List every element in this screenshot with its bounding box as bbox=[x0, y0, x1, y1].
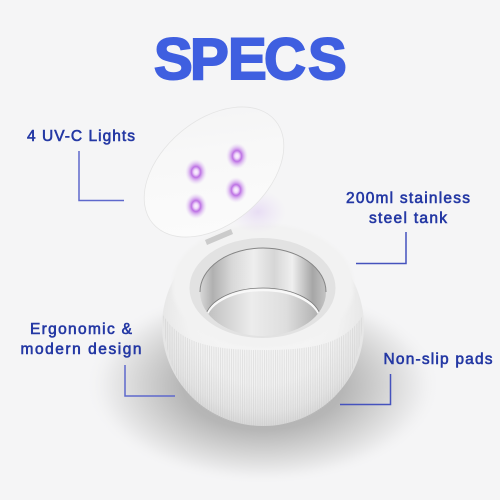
UV light 1 bbox=[226, 143, 248, 169]
ribbed texture bbox=[163, 315, 363, 426]
lid glow bbox=[230, 190, 286, 234]
lid bbox=[119, 81, 309, 263]
steel tank bbox=[200, 249, 326, 336]
label line: steel tank: steel tank bbox=[369, 210, 447, 227]
leader line: UV-C bbox=[79, 151, 124, 200]
title: SPECS bbox=[154, 27, 347, 92]
lid disc bbox=[119, 81, 309, 263]
label: 200ml stainless: 200ml stainless bbox=[346, 190, 470, 207]
UV light 4 bbox=[185, 193, 207, 219]
hinge bbox=[205, 229, 233, 245]
inner lip bbox=[190, 238, 336, 338]
UV light 3 bbox=[225, 177, 247, 203]
UV light 2 bbox=[185, 159, 207, 185]
label: modern design: modern design bbox=[20, 341, 142, 358]
leader line: tank bbox=[356, 232, 406, 264]
tank floor edge bbox=[207, 288, 319, 314]
label: Ergonomic: Ergonomic & bbox=[30, 321, 133, 338]
label: Non-slip pads: Non-slip pads bbox=[384, 351, 493, 368]
device body bbox=[162, 224, 364, 426]
leader line: design bbox=[125, 365, 175, 396]
tank floor bbox=[210, 292, 318, 336]
rim bbox=[172, 224, 354, 348]
label: 4 UV-C Lights: 4 UV-C Lights bbox=[27, 128, 135, 145]
leader line: pads bbox=[340, 374, 390, 404]
floor shadow bbox=[85, 285, 441, 485]
tank rim bbox=[200, 248, 326, 292]
sphere bbox=[162, 226, 364, 426]
tank floor shadow edge bbox=[206, 288, 320, 312]
